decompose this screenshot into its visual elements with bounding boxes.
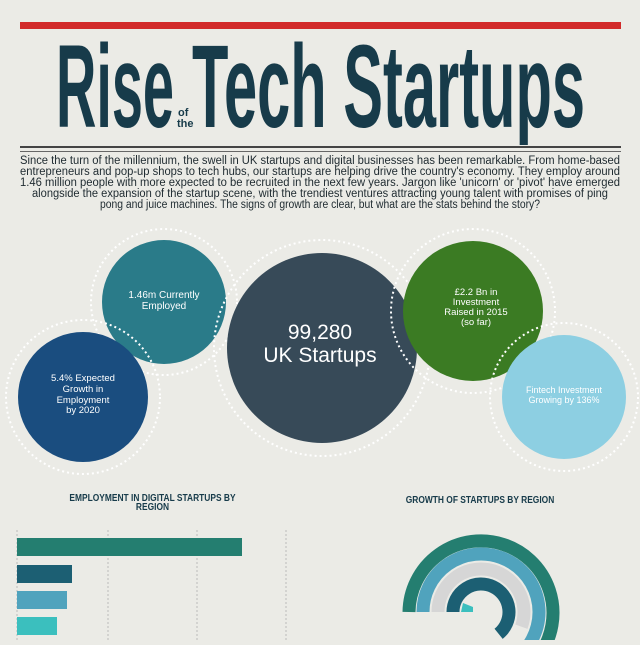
circle: fintech: Fintech Investment bbox=[526, 385, 603, 395]
circle: fintech bbox=[490, 323, 638, 471]
radial arc chart bbox=[402, 534, 560, 640]
intro text: alongside the expansion of the startup scene, with the trendiest ventures attracting young talent with promises of ping bbox=[32, 188, 608, 200]
intro text: Since the turn of the millennium, the swell in UK startups and digital businesses has been remarkable. From home-based bbox=[20, 155, 620, 167]
circle: investment raised: (so far) bbox=[461, 317, 491, 328]
circle: fintech: Growing by 136% bbox=[528, 395, 600, 405]
circle: UK startups: 99,280 bbox=[288, 321, 352, 344]
circle: investment raised: Raised in 2015 bbox=[444, 307, 508, 318]
circle: expected growth: by 2020 bbox=[66, 405, 100, 416]
intro text: 1.46 million people with more expected to be recruited in the next few years. Jargon like 'unicorn' or 'pivot' have emerged bbox=[20, 177, 620, 189]
intro text: pong and juice machines. The signs of growth are clear, but what are the stats behind the story? bbox=[100, 199, 540, 211]
bar chart heading bbox=[69, 492, 236, 513]
bar chart bbox=[16, 530, 286, 640]
red top bar bbox=[20, 22, 621, 29]
circle: expected growth: 5.4% Expected bbox=[51, 373, 115, 384]
divider lines bbox=[20, 146, 621, 148]
circle: investment raised bbox=[391, 229, 555, 393]
bar chart heading: REGION bbox=[136, 501, 169, 513]
circle: investment raised: Investment bbox=[453, 297, 500, 308]
arc chart heading: GROWTH OF STARTUPS BY REGION bbox=[406, 494, 554, 506]
title bbox=[56, 30, 585, 145]
title: of bbox=[178, 107, 189, 119]
intro text: entrepreneurs and pop-up shops to tech hubs, our startups are helping drive the country's economy. They employ around bbox=[20, 166, 620, 178]
circle: currently employed: Employed bbox=[142, 301, 186, 312]
stat circles bbox=[5, 228, 639, 475]
circle: UK startups bbox=[214, 240, 430, 456]
title: the bbox=[177, 118, 194, 130]
circle: currently employed bbox=[91, 229, 237, 375]
circle: expected growth: Employment bbox=[57, 395, 110, 406]
bar chart heading: EMPLOYMENT IN DIGITAL STARTUPS BY bbox=[69, 492, 236, 504]
circle: expected growth bbox=[6, 320, 160, 474]
circle: UK startups: UK Startups bbox=[263, 344, 377, 367]
circle: investment raised: £2.2 Bn in bbox=[455, 287, 497, 298]
circle: currently employed: 1.46m Currently bbox=[128, 290, 200, 301]
intro text bbox=[20, 155, 620, 211]
circle: expected growth: Growth in bbox=[63, 384, 103, 395]
